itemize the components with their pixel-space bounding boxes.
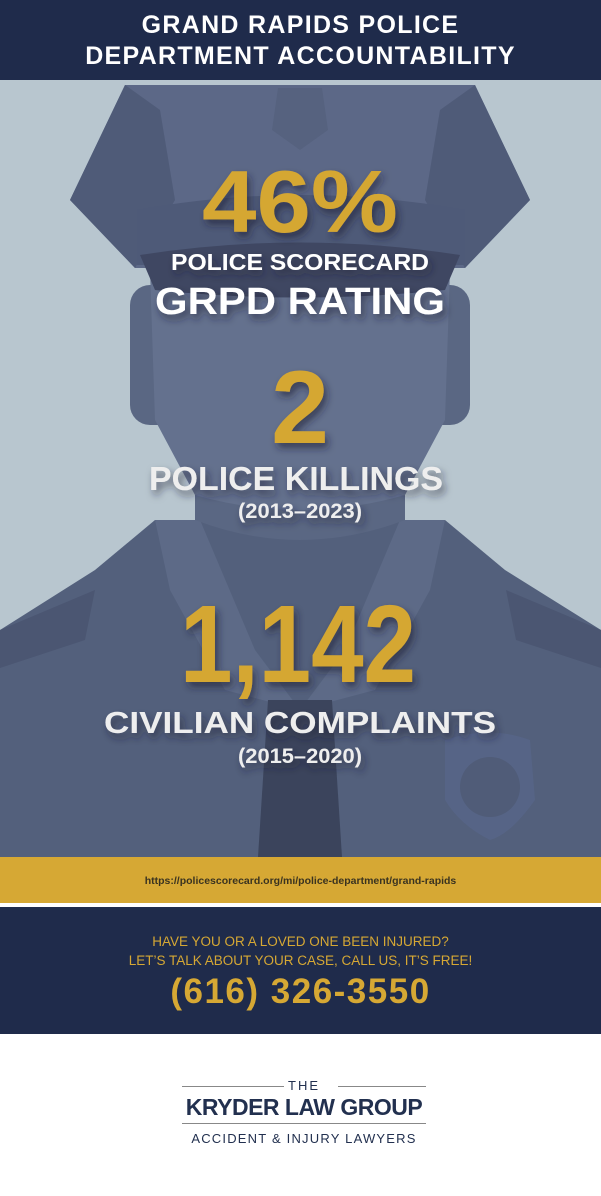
stat: civilian complaints: 1,142: [180, 583, 416, 706]
panel: stats with police silhouette: [0, 80, 601, 857]
stat: 46% rating: GRPD RATING: [155, 281, 445, 323]
header: [0, 0, 601, 80]
stat: police killings: [149, 350, 443, 523]
stat: 46% rating: POLICE SCORECARD: [171, 249, 429, 275]
cta text: HAVE YOU OR A LOVED ONE BEEN INJURED?: [152, 934, 449, 949]
source url band: [0, 857, 601, 903]
logo: Kryder Law Group: KRYDER LAW GROUP: [186, 1094, 422, 1120]
stat: 46% rating: [155, 152, 445, 323]
stat: civilian complaints: (2015–2020): [238, 745, 362, 768]
logo: Kryder Law Group: THE: [288, 1078, 320, 1093]
stat: police killings: (2013–2023): [238, 500, 362, 523]
stat: police killings: POLICE KILLINGS: [149, 460, 443, 497]
logo: Kryder Law Group: ACCIDENT & INJURY LAWYERS: [191, 1131, 417, 1146]
phone number: (616) 326-3550: [170, 972, 431, 1011]
stat: civilian complaints: CIVILIAN COMPLAINTS: [104, 705, 496, 740]
call to action panel: [0, 907, 601, 1034]
icon: police silhouette: [0, 85, 601, 857]
source url band: https://policescorecard.org/mi/police-department/grand-rapids: [145, 875, 456, 887]
header: DEPARTMENT ACCOUNTABILITY: [85, 42, 516, 70]
stat: civilian complaints: [104, 583, 496, 768]
stat: 46% rating: 46%: [202, 152, 398, 251]
header: GRAND RAPIDS POLICE: [142, 11, 459, 39]
logo: Kryder Law Group: [182, 1078, 426, 1146]
stat: police killings: 2: [271, 350, 329, 466]
cta text: [129, 934, 472, 968]
cta text: LET’S TALK ABOUT YOUR CASE, CALL US, IT’S FREE!: [129, 953, 472, 968]
